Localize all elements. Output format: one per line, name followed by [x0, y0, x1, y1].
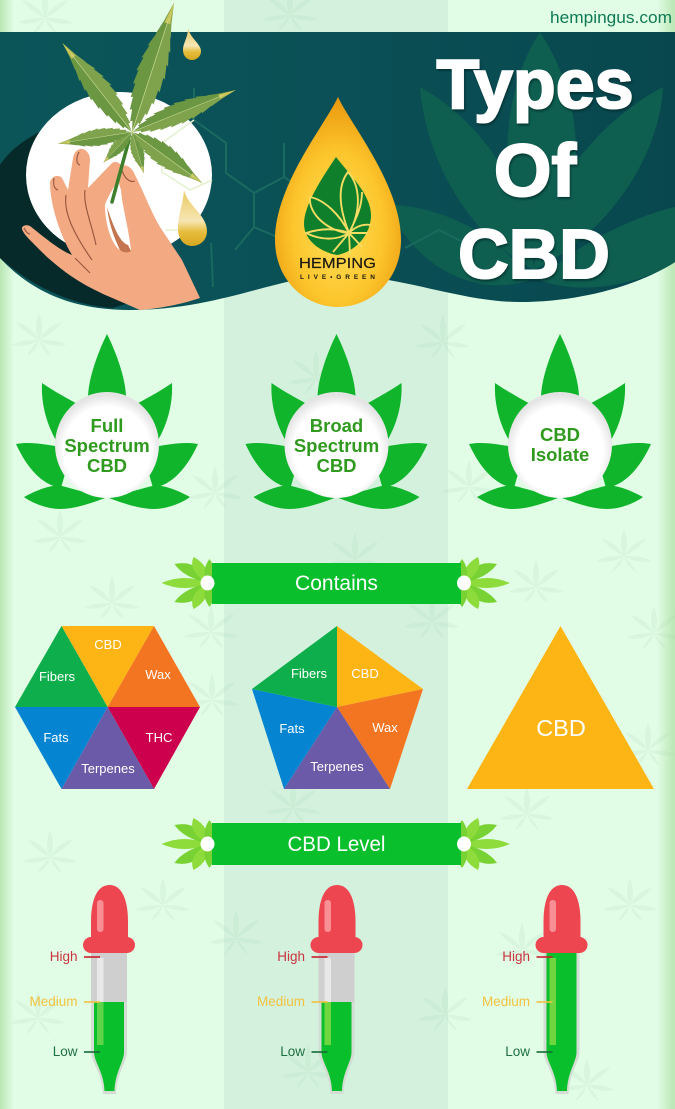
pentagon chart: broad spectrum contents: Fibers: [291, 666, 328, 681]
hemp leaf held by hand: [52, 0, 240, 202]
faint molecule over circle: [162, 120, 212, 230]
hexagon chart: full spectrum contents: CBD: [94, 637, 122, 652]
dropper: broad spectrum level: [257, 885, 362, 1094]
badge: broad spectrum CBD: Spectrum: [294, 435, 379, 456]
hexagon chart: full spectrum contents: Fats: [43, 730, 69, 745]
badge: full spectrum CBD: Spectrum: [64, 435, 150, 456]
badge: broad spectrum CBD: [246, 334, 428, 509]
dropper: broad spectrum level: High: [277, 949, 305, 964]
dropper: broad spectrum level: Medium: [257, 994, 305, 1009]
triangle chart: isolate contents: [467, 626, 654, 789]
dropper: broad spectrum level: Low: [280, 1044, 305, 1059]
badge: CBD isolate: Isolate: [531, 444, 589, 465]
title: CBD: [458, 215, 610, 293]
website url: hempingus.com: [550, 8, 672, 27]
molecule structure lines: [194, 88, 473, 287]
pentagon chart: broad spectrum contents: [252, 626, 423, 789]
logo hemp leaf: [304, 157, 371, 255]
dropper: full spectrum level: High: [50, 949, 78, 964]
pentagon chart: broad spectrum contents: Fats: [279, 721, 305, 736]
logo drop: [275, 97, 401, 307]
dropper: isolate level: Low: [505, 1044, 530, 1059]
dropper: full spectrum level: [29, 885, 135, 1094]
dropper: isolate level: High: [502, 949, 530, 964]
small oil drop: [183, 28, 201, 60]
logo wordmark: HEMPING: [299, 255, 376, 272]
banner: CBD level: [162, 818, 510, 870]
hexagon chart: full spectrum contents: Fibers: [39, 669, 76, 684]
dropper: isolate level: [482, 885, 588, 1094]
badge: full spectrum CBD: [16, 334, 198, 509]
badge: full spectrum CBD: CBD: [87, 455, 127, 476]
badge: CBD isolate: [469, 334, 651, 509]
background hemp leaf: [388, 32, 675, 288]
title: [436, 45, 634, 293]
header banner: [0, 0, 675, 310]
pentagon chart: broad spectrum contents: Terpenes: [310, 759, 364, 774]
hexagon chart: full spectrum contents: Wax: [145, 667, 171, 682]
pentagon chart: broad spectrum contents: CBD: [351, 666, 379, 681]
banner: contains: [162, 557, 510, 609]
title: Of: [494, 129, 576, 212]
dropper: full spectrum level: Medium: [29, 994, 78, 1009]
badge: broad spectrum CBD: Broad: [310, 415, 363, 436]
pentagon chart: broad spectrum contents: Wax: [372, 720, 398, 735]
banner: contains: Contains: [295, 572, 378, 595]
banner: CBD level: CBD Level: [288, 833, 386, 856]
hexagon chart: full spectrum contents: Terpenes: [81, 761, 135, 776]
hexagon chart: full spectrum contents: [15, 626, 200, 789]
logo tagline: LIVE•GREEN: [300, 274, 375, 281]
title: Types: [436, 45, 634, 123]
dark sleeve: [0, 128, 140, 308]
oil drop on circle: [178, 190, 207, 246]
triangle chart: isolate contents: CBD: [536, 715, 586, 741]
dropper: full spectrum level: Low: [53, 1044, 78, 1059]
hexagon chart: full spectrum contents: THC: [146, 730, 172, 745]
badge: broad spectrum CBD: CBD: [316, 455, 357, 476]
badge: CBD isolate: CBD: [540, 424, 580, 445]
white circle: [26, 92, 212, 258]
dropper: isolate level: Medium: [482, 994, 530, 1009]
badge: full spectrum CBD: Full: [91, 415, 123, 436]
hand: [22, 149, 200, 310]
